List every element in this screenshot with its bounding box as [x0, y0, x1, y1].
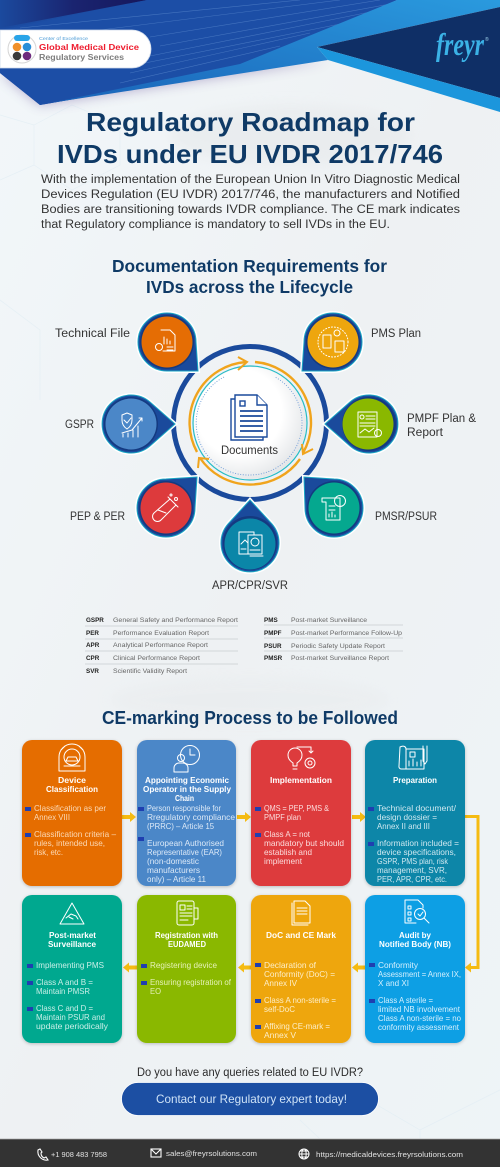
- card: post-market surveillance: [22, 895, 122, 1043]
- pin: pms plan: [302, 313, 362, 371]
- card: appointing economic operator: [137, 740, 236, 886]
- label: technical file: Technical File: [55, 328, 130, 340]
- label: gspr: GSPR: [65, 419, 94, 431]
- intro paragraph: [41, 174, 460, 231]
- card bullets: [255, 804, 344, 866]
- pin: technical file: [138, 313, 198, 371]
- card bullets: only) – Article 11: [147, 875, 206, 884]
- card title: Appointing Economic: [145, 775, 229, 785]
- label: documents: Documents: [221, 445, 278, 457]
- glossary right column: Post-market Surveillance Report: [291, 655, 389, 662]
- card bullets: manufacturers: [147, 866, 200, 875]
- card title: [143, 775, 231, 803]
- card title: EUDAMED: [168, 939, 206, 949]
- title: [57, 107, 443, 169]
- card bullets: Annex II and III: [377, 822, 430, 831]
- glossary left column: Analytical Performance Report: [113, 642, 208, 649]
- badge: global medical device regulatory services: Regulatory Services: [39, 53, 125, 62]
- card bullets: PMPF plan: [264, 813, 301, 822]
- card bullets: Classification as per: [34, 804, 106, 813]
- card bullets: risk, etc.: [34, 848, 63, 857]
- card title: Device: [58, 775, 86, 785]
- icon: scanner: [59, 744, 85, 771]
- footer bar: [0, 1138, 500, 1167]
- card bullets: Class C and D =: [36, 1004, 93, 1013]
- card bullets: Declaration of: [264, 961, 317, 970]
- card title: Preparation: [393, 775, 437, 785]
- title: Regulatory Roadmap for: [86, 107, 415, 137]
- card bullets: Conformity (DoC) =: [264, 970, 335, 979]
- glossary right column: PMPF: [264, 630, 282, 637]
- card bullets: Class A sterile =: [378, 996, 433, 1005]
- card bullets: implement: [264, 857, 303, 866]
- heading: ce-marking process: CE-marking Process to be Followed: [102, 708, 398, 728]
- heading: documentation requirements: [112, 256, 387, 297]
- pin: gspr: [102, 395, 175, 453]
- card bullets: Classification criteria –: [34, 830, 116, 839]
- icon: person and clock: [174, 746, 200, 772]
- glossary left column: CPR: [86, 655, 100, 662]
- card bullets: Class A and B =: [36, 978, 93, 987]
- label: apr cpr svr: APR/CPR/SVR: [212, 580, 288, 592]
- card bullets: Assessment = Annex IX,: [378, 970, 461, 979]
- intro paragraph: Devices Regulation (EU IVDR) 2017/746, the manufacturers and Notified: [41, 189, 460, 201]
- card bullets: Representative (EAR): [147, 848, 222, 857]
- website: https://medicaldevices.freyrsolutions.com: [316, 1150, 463, 1159]
- card bullets: [255, 961, 336, 1040]
- icon: phone: [38, 1149, 48, 1160]
- card title: [46, 775, 98, 794]
- card bullets: [25, 804, 116, 857]
- glossary left column: PER: [86, 630, 99, 637]
- label: pmpf plan and report: [407, 413, 476, 439]
- card title: Notified Body (NB): [379, 939, 451, 949]
- card bullets: conformity assessment: [378, 1023, 460, 1032]
- card bullets: self-DoC: [264, 1005, 295, 1014]
- glossary left column: GSPR: [86, 617, 104, 624]
- card bullets: Maintain PMSR: [36, 987, 90, 996]
- card bullets: Class A = not: [264, 830, 311, 839]
- card bullets: Annex VIII: [34, 813, 70, 822]
- card: registration with eudamed: [137, 895, 236, 1043]
- intro paragraph: that Regulatory compliance is mandatory to sell IVDs in the EU.: [41, 219, 390, 231]
- header banner: [0, 0, 500, 112]
- card: audit by notified body: [365, 895, 465, 1043]
- card title: [48, 930, 96, 949]
- heading: documentation requirements: IVDs across the Lifecycle: [146, 277, 353, 297]
- card title: [155, 930, 218, 949]
- label: pms plan: PMS Plan: [371, 328, 421, 340]
- card bullets: mandatory but should: [264, 839, 344, 848]
- card bullets: Class A non-sterile = no: [378, 1014, 461, 1023]
- card bullets: EO: [150, 987, 161, 996]
- card bullets: QMS = PEP, PMS &: [264, 804, 329, 813]
- glossary right column: Post-market Surveillance: [291, 617, 368, 624]
- glossary right column: PMS: [264, 617, 278, 624]
- icon: warning triangle: [60, 903, 84, 924]
- card bullets: Annex V: [264, 1031, 297, 1040]
- phone number: +1 908 483 7958: [51, 1150, 107, 1159]
- card bullets: Class A non-sterile =: [264, 996, 336, 1005]
- glossary right column: Post-market Performance Follow-Up: [291, 630, 403, 637]
- icon: audit checklist: [405, 900, 429, 923]
- card: doc and ce mark: [251, 895, 351, 1043]
- arrow: process connectors: [122, 812, 480, 972]
- icon: registration form: [177, 901, 198, 925]
- card bullets: (PRRC) – Article 15: [147, 822, 214, 831]
- contact button: Contact our Regulatory expert today!: [156, 1092, 347, 1106]
- card bullets: management, SVR,: [377, 866, 447, 875]
- badge: global medical device regulatory services: Global Medical Device: [39, 42, 139, 52]
- icon: mail: [151, 1149, 161, 1157]
- card bullets: European Authorised: [147, 839, 224, 848]
- card bullets: Rregulatory compliance: [147, 813, 235, 822]
- card title: Operator in the Supply: [143, 784, 231, 794]
- card bullets: Conformity: [378, 961, 419, 970]
- card title: Registration with: [155, 930, 218, 940]
- glossary right column: [264, 617, 403, 662]
- card: implementation: [251, 740, 351, 886]
- label: pmpf plan and report: Report: [407, 427, 444, 439]
- pin: pep and per: [137, 477, 197, 537]
- card bullets: Implementing PMS: [36, 961, 105, 970]
- card bullets: [27, 961, 109, 1031]
- icon: documents: [231, 395, 267, 440]
- card title: Post-market: [49, 930, 96, 940]
- card title: Surveillance: [48, 939, 96, 949]
- card bullets: update periodically: [36, 1022, 109, 1031]
- card bullets: Registering device: [150, 961, 217, 970]
- card bullets: X and XI: [378, 979, 409, 988]
- card: device classification: [22, 740, 122, 886]
- glossary right column: PSUR: [264, 643, 282, 650]
- glossary left column: [85, 617, 238, 675]
- card title: Audit by: [399, 930, 431, 940]
- card bullets: rules, intended use,: [34, 839, 105, 848]
- glossary left column: Performance Evaluation Report: [113, 630, 209, 637]
- card bullets: Person responsible for: [147, 804, 221, 813]
- card title: Implementation: [270, 775, 332, 785]
- glossary left column: Scientific Validity Report: [113, 668, 187, 675]
- card bullets: PER, APR, CPR, etc.: [377, 875, 447, 884]
- email: sales@freyrsolutions.com: [166, 1149, 257, 1158]
- card bullets: (non-domestic: [147, 857, 199, 866]
- label: pmsr and psur: PMSR/PSUR: [375, 511, 437, 523]
- card bullets: [369, 961, 461, 1032]
- badge: global medical device regulatory services: Center of Excellence: [39, 36, 89, 41]
- title: IVDs under EU IVDR 2017/746: [57, 139, 443, 169]
- freyr logo: ®: [485, 36, 489, 43]
- card title: DoC and CE Mark: [266, 930, 336, 940]
- card bullets: [138, 804, 235, 884]
- badge: global medical device regulatory services: [0, 30, 151, 68]
- query text: Do you have any queries related to EU IVDR?: [137, 1067, 363, 1079]
- card bullets: establish and: [264, 848, 312, 857]
- card bullets: Annex IV: [264, 979, 298, 988]
- card bullets: Technical document/: [377, 804, 457, 813]
- card bullets: Ensuring registration of: [150, 978, 232, 987]
- contact button: [122, 1082, 378, 1116]
- glossary left column: APR: [86, 642, 100, 649]
- pin: pmpf plan and report: [325, 395, 398, 453]
- card bullets: [368, 804, 459, 884]
- label: pmpf plan and report: PMPF Plan &: [407, 413, 476, 425]
- card bullets: design dossier =: [377, 813, 437, 822]
- label: pep and per: PEP & PER: [70, 511, 125, 523]
- intro paragraph: With the implementation of the European Union In Vitro Diagnostic Medical: [41, 174, 460, 186]
- card bullets: Affixing CE-mark =: [264, 1022, 330, 1031]
- card title: Chain: [175, 793, 194, 803]
- icon: globe: [299, 1149, 309, 1159]
- outer ring: [174, 346, 326, 500]
- pin: apr cpr svr: [221, 500, 279, 572]
- card bullets: device specifications,: [377, 848, 456, 857]
- pin: pmsr and psur: [304, 477, 363, 537]
- icon: document stack: [292, 901, 310, 925]
- glossary left column: General Safety and Performance Report: [113, 617, 238, 624]
- lifecycle diagram: [102, 313, 398, 572]
- card bullets: [141, 961, 232, 996]
- icon: blueprint: [399, 746, 427, 769]
- card bullets: limited NB involvement: [378, 1005, 461, 1014]
- freyr logo: freyr: [436, 26, 484, 62]
- card bullets: Maintain PSUR and: [36, 1013, 105, 1022]
- card: preparation: [365, 740, 465, 886]
- centre disc: [190, 357, 313, 485]
- card title: Classification: [46, 784, 98, 794]
- heading: documentation requirements: Documentation Requirements for: [112, 256, 387, 276]
- glossary right column: Periodic Safety Update Report: [291, 643, 385, 650]
- glossary right column: PMSR: [264, 655, 283, 662]
- card bullets: Information included =: [377, 839, 459, 848]
- glossary left column: SVR: [86, 668, 99, 675]
- card title: [379, 930, 451, 949]
- icon: bulb and gear: [288, 747, 315, 769]
- glossary left column: Clinical Performance Report: [113, 655, 200, 662]
- intro paragraph: Bodies are transitioning towards IVDR compliance. The CE mark indicates: [41, 204, 460, 216]
- card bullets: GSPR, PMS plan, risk: [377, 857, 449, 866]
